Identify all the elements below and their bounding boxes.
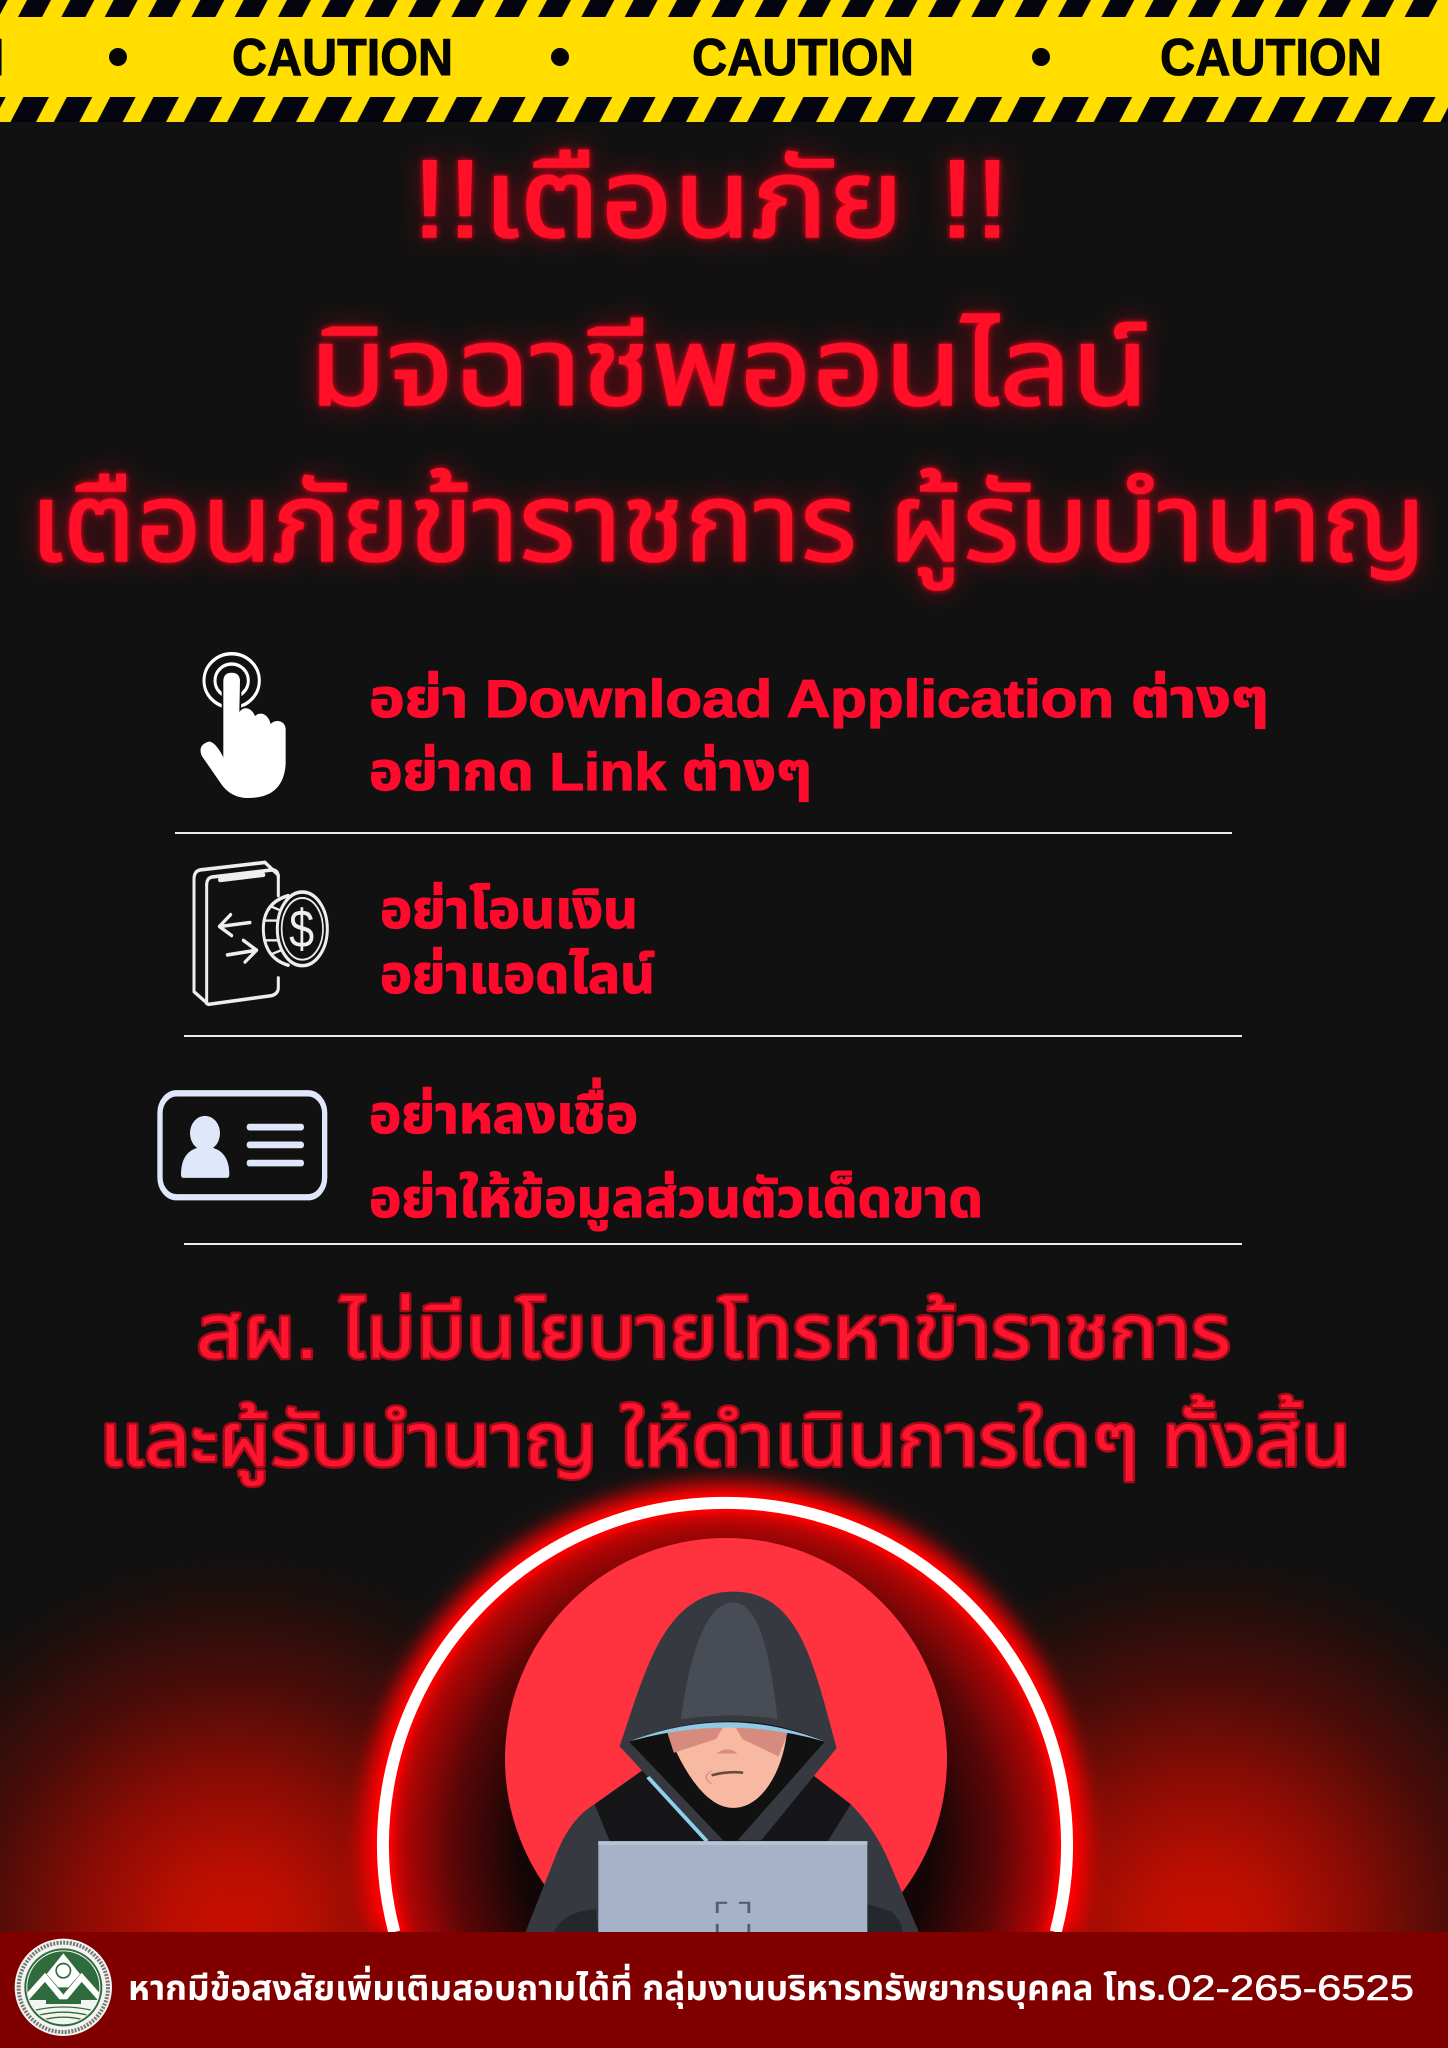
footer bar: 02-265-6525 (1167, 1969, 1414, 2008)
footer bar (0, 1932, 1448, 2048)
logo emblem (15, 1939, 112, 2036)
icon: tapping hand (201, 654, 286, 798)
warning item: do not transfer money or add line (194, 862, 655, 1005)
neon ring with hacker (377, 1497, 1073, 1935)
red disc (505, 1538, 947, 1892)
warning item: do not transfer money or add line: อย่าโอนเงิน (380, 881, 638, 940)
policy notice: สผ. ไม่มีนโยบายโทรหาข้าราชการ (196, 1290, 1231, 1374)
icon: ID card (160, 1093, 325, 1197)
warning item: do not download or click links: อย่ากด Link ต่างๆ (369, 743, 812, 802)
warning item: do not download or click links (201, 654, 1269, 802)
warning item: do not transfer money or add line: อย่าแอดไลน์ (380, 946, 655, 1005)
hacker figure (525, 1592, 919, 1935)
neon title: !!เตือนภัย !! (412, 138, 1010, 261)
neon title: เตือนภัยข้าราชการ ผู้รับบำนาญ (30, 462, 1426, 590)
policy notice: และผู้รับบำนาญ ให้ดำเนินการใดๆ ทั้งสิ้น (99, 1394, 1351, 1486)
warning item: do not be fooled or give personal data (160, 1078, 983, 1231)
caution tape banner: CAUTION (692, 29, 914, 87)
caution tape banner: CAUTION (1160, 29, 1382, 87)
warning item: do not download or click links: อย่า Download Application ต่างๆ (369, 670, 1269, 729)
footer bar: หากมีข้อสงสัยเพิ่มเติมสอบถามได้ที่ กลุ่มงานบริหารทรัพยากรบุคคล โทร. (128, 1963, 1166, 2009)
neon title (30, 138, 1426, 590)
red background glow (0, 1552, 1448, 1932)
policy notice (99, 1290, 1351, 1486)
icon: phone money transfer: $ (289, 900, 314, 959)
caution tape banner (0, 0, 1448, 122)
neon title: มิจฉาชีพออนไลน์ (309, 306, 1149, 429)
caution tape banner: CAUTION (232, 29, 453, 87)
warning item: do not be fooled or give personal data: อย่าให้ข้อมูลส่วนตัวเด็ดขาด (369, 1170, 983, 1231)
icon: phone money transfer (194, 862, 327, 1004)
warning item: do not be fooled or give personal data: อย่าหลงเชื่อ (369, 1078, 638, 1145)
laptop (598, 1841, 867, 1935)
